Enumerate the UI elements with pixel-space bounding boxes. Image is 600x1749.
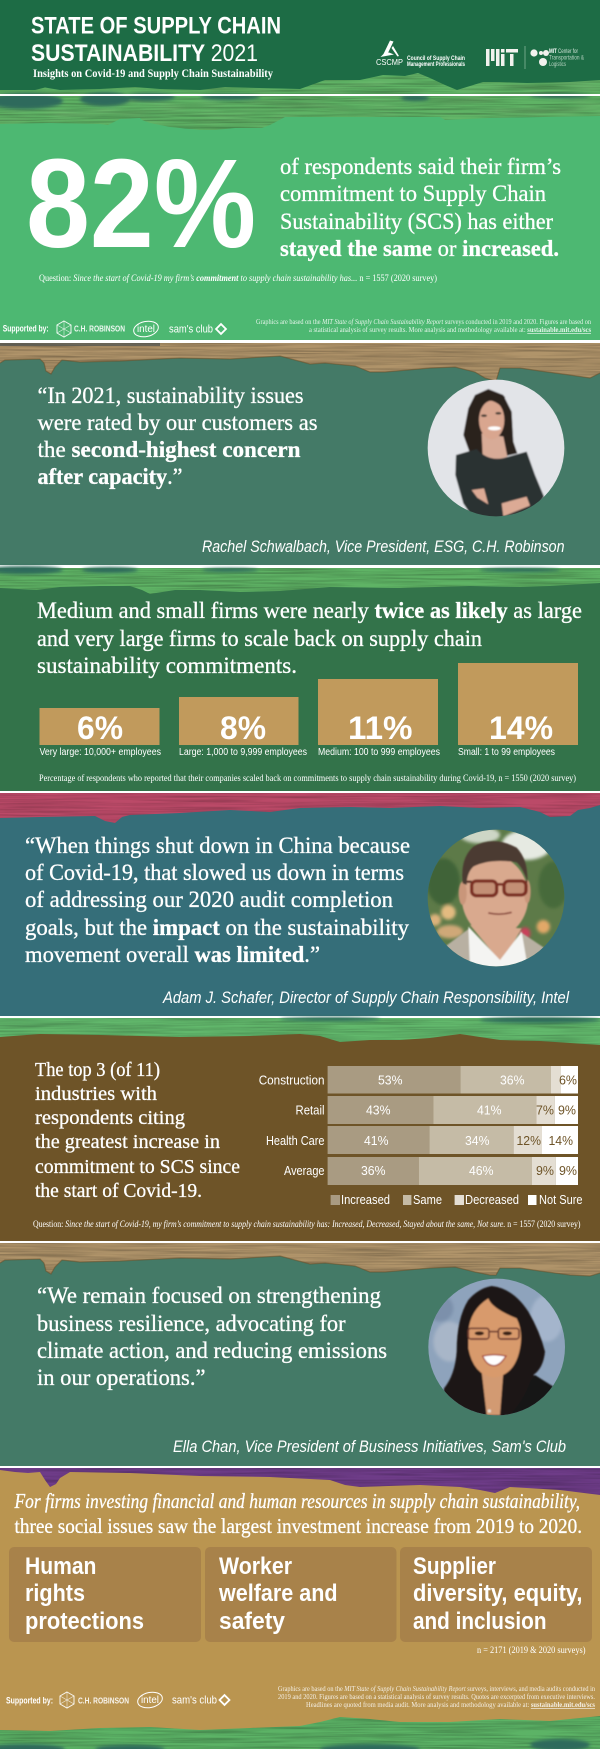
logo: CSCMP: Council of Supply Chain xyxy=(407,56,465,62)
card: worker welfare xyxy=(205,1547,396,1642)
row: Construction: 36% xyxy=(500,1074,524,1088)
logo: MIT CTL xyxy=(486,46,584,69)
row: Average: 9% xyxy=(536,1164,554,1178)
texture band: wood xyxy=(0,1243,600,1285)
card: human rights: protections xyxy=(25,1608,144,1635)
sponsors row: intel xyxy=(141,1695,159,1706)
quote text: in our operations.” xyxy=(37,1365,206,1390)
row: Construction: 6% xyxy=(559,1074,577,1088)
texture band: red paper xyxy=(0,793,600,828)
bar: large firms xyxy=(179,697,307,758)
panel: firm size comparison xyxy=(0,583,600,791)
statement text xyxy=(280,154,561,261)
quote text: “In 2021, sustainability issues xyxy=(38,383,304,408)
panel: industries chart xyxy=(0,1034,600,1241)
intro text: the start of Covid-19. xyxy=(35,1180,202,1202)
row: Construction: 53% xyxy=(378,1074,402,1088)
quote text: the second-highest concern xyxy=(38,437,301,462)
row: Health Care: 41% xyxy=(364,1134,388,1148)
intro text: commitment to SCS since xyxy=(35,1156,240,1178)
row: Health Care: 14% xyxy=(548,1134,573,1148)
heading text xyxy=(14,1489,582,1538)
sponsors row: intel xyxy=(137,324,155,335)
bar: very large firms xyxy=(40,708,161,758)
quote text xyxy=(25,833,410,967)
card: supplier diversity: diversity, equity, xyxy=(413,1580,582,1607)
row: Average: 36% xyxy=(361,1164,386,1178)
quote text: climate action, and reducing emissions xyxy=(37,1338,387,1363)
panel: social issues xyxy=(0,1470,600,1731)
logo: MIT CTL: Logistics xyxy=(549,62,566,68)
statement text: stayed the same or increased. xyxy=(280,236,559,261)
texture band: wood xyxy=(0,343,600,385)
sponsors row xyxy=(6,1690,229,1710)
intro text: the greatest increase in xyxy=(35,1131,220,1153)
logo: MIT CTL: MIT Center for xyxy=(549,49,578,55)
heading text xyxy=(37,598,582,678)
sample size note: n = 2171 (2019 & 2020 surveys) xyxy=(477,1645,586,1656)
subtitle: Insights on Covid-19 and Supply Chain Sustainability xyxy=(33,66,273,80)
panel background xyxy=(0,805,600,1016)
row: Retail: 7% xyxy=(536,1104,554,1118)
sponsors row xyxy=(3,319,226,339)
row: Retail: Retail xyxy=(296,1102,325,1118)
intro text xyxy=(35,1059,240,1202)
logo: MIT CTL: Transportation & xyxy=(549,56,584,62)
title xyxy=(31,12,281,67)
card: supplier diversity: and inclusion xyxy=(413,1608,546,1635)
legend: Increased xyxy=(341,1192,390,1207)
intro text: respondents citing xyxy=(35,1107,185,1129)
panel background xyxy=(0,1256,600,1466)
row: Retail: 43% xyxy=(366,1104,390,1118)
stacked bar chart xyxy=(259,1066,582,1207)
card: human rights xyxy=(9,1547,201,1642)
photo: Adam Schafer xyxy=(428,830,564,966)
panel background xyxy=(0,1470,600,1731)
row: Average: Average xyxy=(284,1163,324,1178)
quote text: of addressing our 2020 audit completion xyxy=(25,887,393,912)
bar: small firms xyxy=(458,663,578,758)
logo: CSCMP xyxy=(376,40,465,68)
question note: Question: Since the start of Covid-19 my firm’s commitment to supply chain sustainability has... n = 1557 (2020 survey) xyxy=(39,273,437,284)
methodology note: Headlines are quoted from media audit. More analysis and methodology available at: sustainable.mit.edu/scs xyxy=(306,1701,595,1709)
texture band: purple paper xyxy=(0,1468,600,1500)
statement text: commitment to Supply Chain xyxy=(280,181,546,206)
texture band: green paper xyxy=(0,566,600,600)
methodology note: Graphics are based on the MIT State of Supply Chain Sustainability Report surveys conducted in 2019 and 2020. Figures are based on xyxy=(256,318,591,326)
sponsors row: sam's club xyxy=(169,324,213,336)
heading text: sustainability commitments. xyxy=(37,653,297,678)
bar: very large firms: Very large: 10,000+ employees xyxy=(40,747,161,758)
title: SUSTAINABILITY 2021 xyxy=(31,40,258,67)
bar: large firms: 8% xyxy=(220,710,266,746)
card: supplier diversity xyxy=(400,1547,592,1642)
row: Health Care: Health Care xyxy=(266,1133,324,1148)
row: Average: 9% xyxy=(559,1164,577,1178)
title: STATE OF SUPPLY CHAIN xyxy=(31,12,281,40)
sponsors row: C.H. ROBINSON xyxy=(78,1696,129,1706)
legend: Decreased xyxy=(465,1192,519,1207)
quote text: “When things shut down in China because xyxy=(25,833,410,858)
question note: Question: Since the start of Covid-19, my firm’s commitment to supply chain sustainability has: Increased, Decreased, Stayed about the same, Not sure. n = 1557 (2020 survey) xyxy=(33,1219,580,1229)
legend: Not Sure xyxy=(539,1192,582,1207)
photo: Ella Chan xyxy=(428,1278,565,1416)
methodology note xyxy=(278,1685,595,1709)
row: Retail: 41% xyxy=(477,1104,502,1118)
header background xyxy=(0,0,600,90)
panel background xyxy=(0,356,600,565)
row: Average xyxy=(284,1157,578,1185)
row: Health Care: 12% xyxy=(516,1134,541,1148)
heading text: and very large firms to scale back on supply chain xyxy=(37,626,482,651)
texture band: green paper under header xyxy=(0,70,600,130)
panel: Rachel Schwalbach quote xyxy=(0,356,600,565)
row: Health Care xyxy=(266,1126,578,1154)
methodology note xyxy=(256,318,591,334)
quote text: of Covid-19, that slowed us down in terms xyxy=(25,860,404,885)
statement text: Sustainability (SCS) has either xyxy=(280,209,553,234)
quote text: after capacity.” xyxy=(38,464,182,489)
bar: small firms: 14% xyxy=(489,710,553,746)
bar: large firms: Large: 1,000 to 9,999 employees xyxy=(179,747,307,758)
row: Construction: Construction xyxy=(259,1072,324,1088)
bar: medium firms: 11% xyxy=(348,710,412,746)
card: human rights: rights xyxy=(25,1580,85,1607)
legend xyxy=(331,1192,582,1207)
sponsors row: Supported by: xyxy=(6,1696,53,1706)
texture band: green paper footer xyxy=(0,1700,600,1749)
photo: Rachel Schwalbach xyxy=(428,380,564,516)
row: Construction xyxy=(259,1066,578,1094)
legend: Same xyxy=(413,1192,442,1207)
heading text: Medium and small firms were nearly twice as likely as large xyxy=(37,598,582,623)
row: Average: 46% xyxy=(469,1164,494,1178)
bar: medium firms xyxy=(318,679,440,758)
big number: 82% xyxy=(26,133,256,274)
quote text: were rated by our customers as xyxy=(38,410,318,435)
card: worker welfare: Worker xyxy=(219,1553,292,1580)
quote text: “We remain focused on strengthening xyxy=(37,1283,381,1308)
intro text: The top 3 (of 11) xyxy=(35,1059,160,1081)
panel: Adam Schafer quote xyxy=(0,805,600,1016)
texture band: green paper xyxy=(0,1017,600,1052)
sponsors row: C.H. ROBINSON xyxy=(74,324,125,334)
bar chart xyxy=(40,663,578,758)
card: worker welfare: welfare and xyxy=(218,1580,338,1607)
quote text: business resilience, advocating for xyxy=(37,1311,346,1336)
quote text: movement overall was limited.” xyxy=(25,942,320,967)
logo: CSCMP: Management Professionals xyxy=(407,62,465,68)
card: worker welfare: safety xyxy=(219,1608,286,1635)
panel background xyxy=(0,583,600,791)
sponsors row: sam's club xyxy=(172,1694,217,1706)
quote text: goals, but the impact on the sustainability xyxy=(25,915,409,940)
row: Retail xyxy=(296,1096,578,1124)
panel: Ella Chan quote xyxy=(0,1256,600,1466)
bar: small firms: Small: 1 to 99 employees xyxy=(458,747,555,758)
quote text xyxy=(37,1283,387,1390)
card: human rights: Human xyxy=(25,1553,96,1580)
intro text: industries with xyxy=(35,1083,157,1105)
panel: header xyxy=(0,0,600,90)
panel background xyxy=(0,116,600,340)
card: supplier diversity: Supplier xyxy=(413,1553,496,1580)
row: Health Care: 34% xyxy=(465,1134,490,1148)
sponsors row: Supported by: xyxy=(3,324,49,334)
methodology note: a statistical analysis of survey results. More analysis and methodology available at: sustainable.mit.edu/scs xyxy=(309,326,591,334)
bar: medium firms: Medium: 100 to 999 employees xyxy=(318,747,440,758)
row: Retail: 9% xyxy=(558,1104,576,1118)
panel: 82 percent statistic xyxy=(0,116,600,340)
bar: very large firms: 6% xyxy=(77,710,123,746)
logo: CSCMP: CSCMP xyxy=(376,57,403,67)
statement text: of respondents said their firm’s xyxy=(280,154,561,179)
panel background xyxy=(0,1034,600,1241)
quote text xyxy=(38,383,318,489)
